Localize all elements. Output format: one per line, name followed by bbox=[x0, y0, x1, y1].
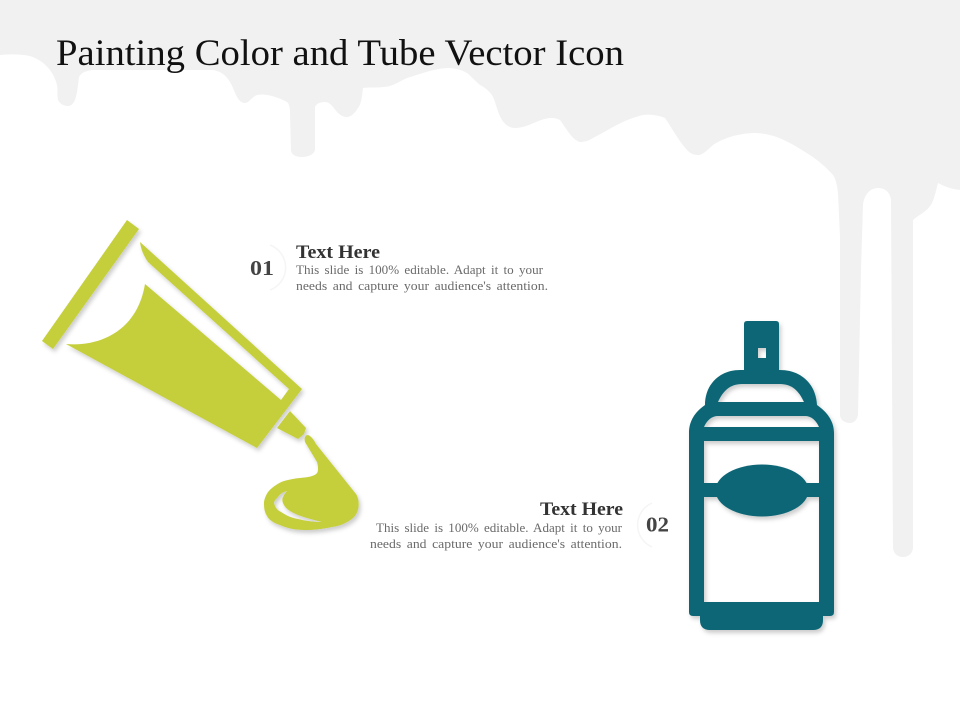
description 02: This slide is 100% editable. Adapt it to your bbox=[376, 520, 623, 535]
text block 01 bbox=[250, 242, 548, 293]
can label bbox=[716, 464, 808, 516]
number badge 02: 02 bbox=[646, 512, 669, 536]
title: Painting Color and Tube Vector Icon bbox=[56, 33, 624, 74]
icon: spray can bbox=[689, 321, 834, 630]
spray nozzle bbox=[744, 321, 779, 376]
number badge 01 bbox=[250, 245, 286, 290]
tube nozzle bbox=[277, 411, 306, 439]
paint puddle bbox=[264, 435, 359, 530]
can base bbox=[700, 610, 823, 630]
can body bbox=[689, 405, 834, 616]
background: paint drips bbox=[0, 0, 960, 557]
description 02: needs and capture your audience's attention. bbox=[370, 536, 622, 551]
description 01 bbox=[296, 262, 548, 293]
description 01: needs and capture your audience's attention. bbox=[296, 278, 548, 293]
icon: paint tube bbox=[42, 220, 359, 530]
tube crimp bar bbox=[42, 220, 139, 349]
can dome bbox=[705, 370, 817, 416]
number badge 02 bbox=[638, 503, 669, 547]
description 02 bbox=[370, 520, 623, 551]
heading 01: Text Here bbox=[296, 242, 380, 263]
description 01: This slide is 100% editable. Adapt it to your bbox=[296, 262, 544, 277]
tube body bbox=[66, 242, 302, 448]
number badge 01: 01 bbox=[250, 256, 274, 280]
heading 02: Text Here bbox=[540, 499, 623, 520]
text block 02 bbox=[370, 499, 669, 551]
